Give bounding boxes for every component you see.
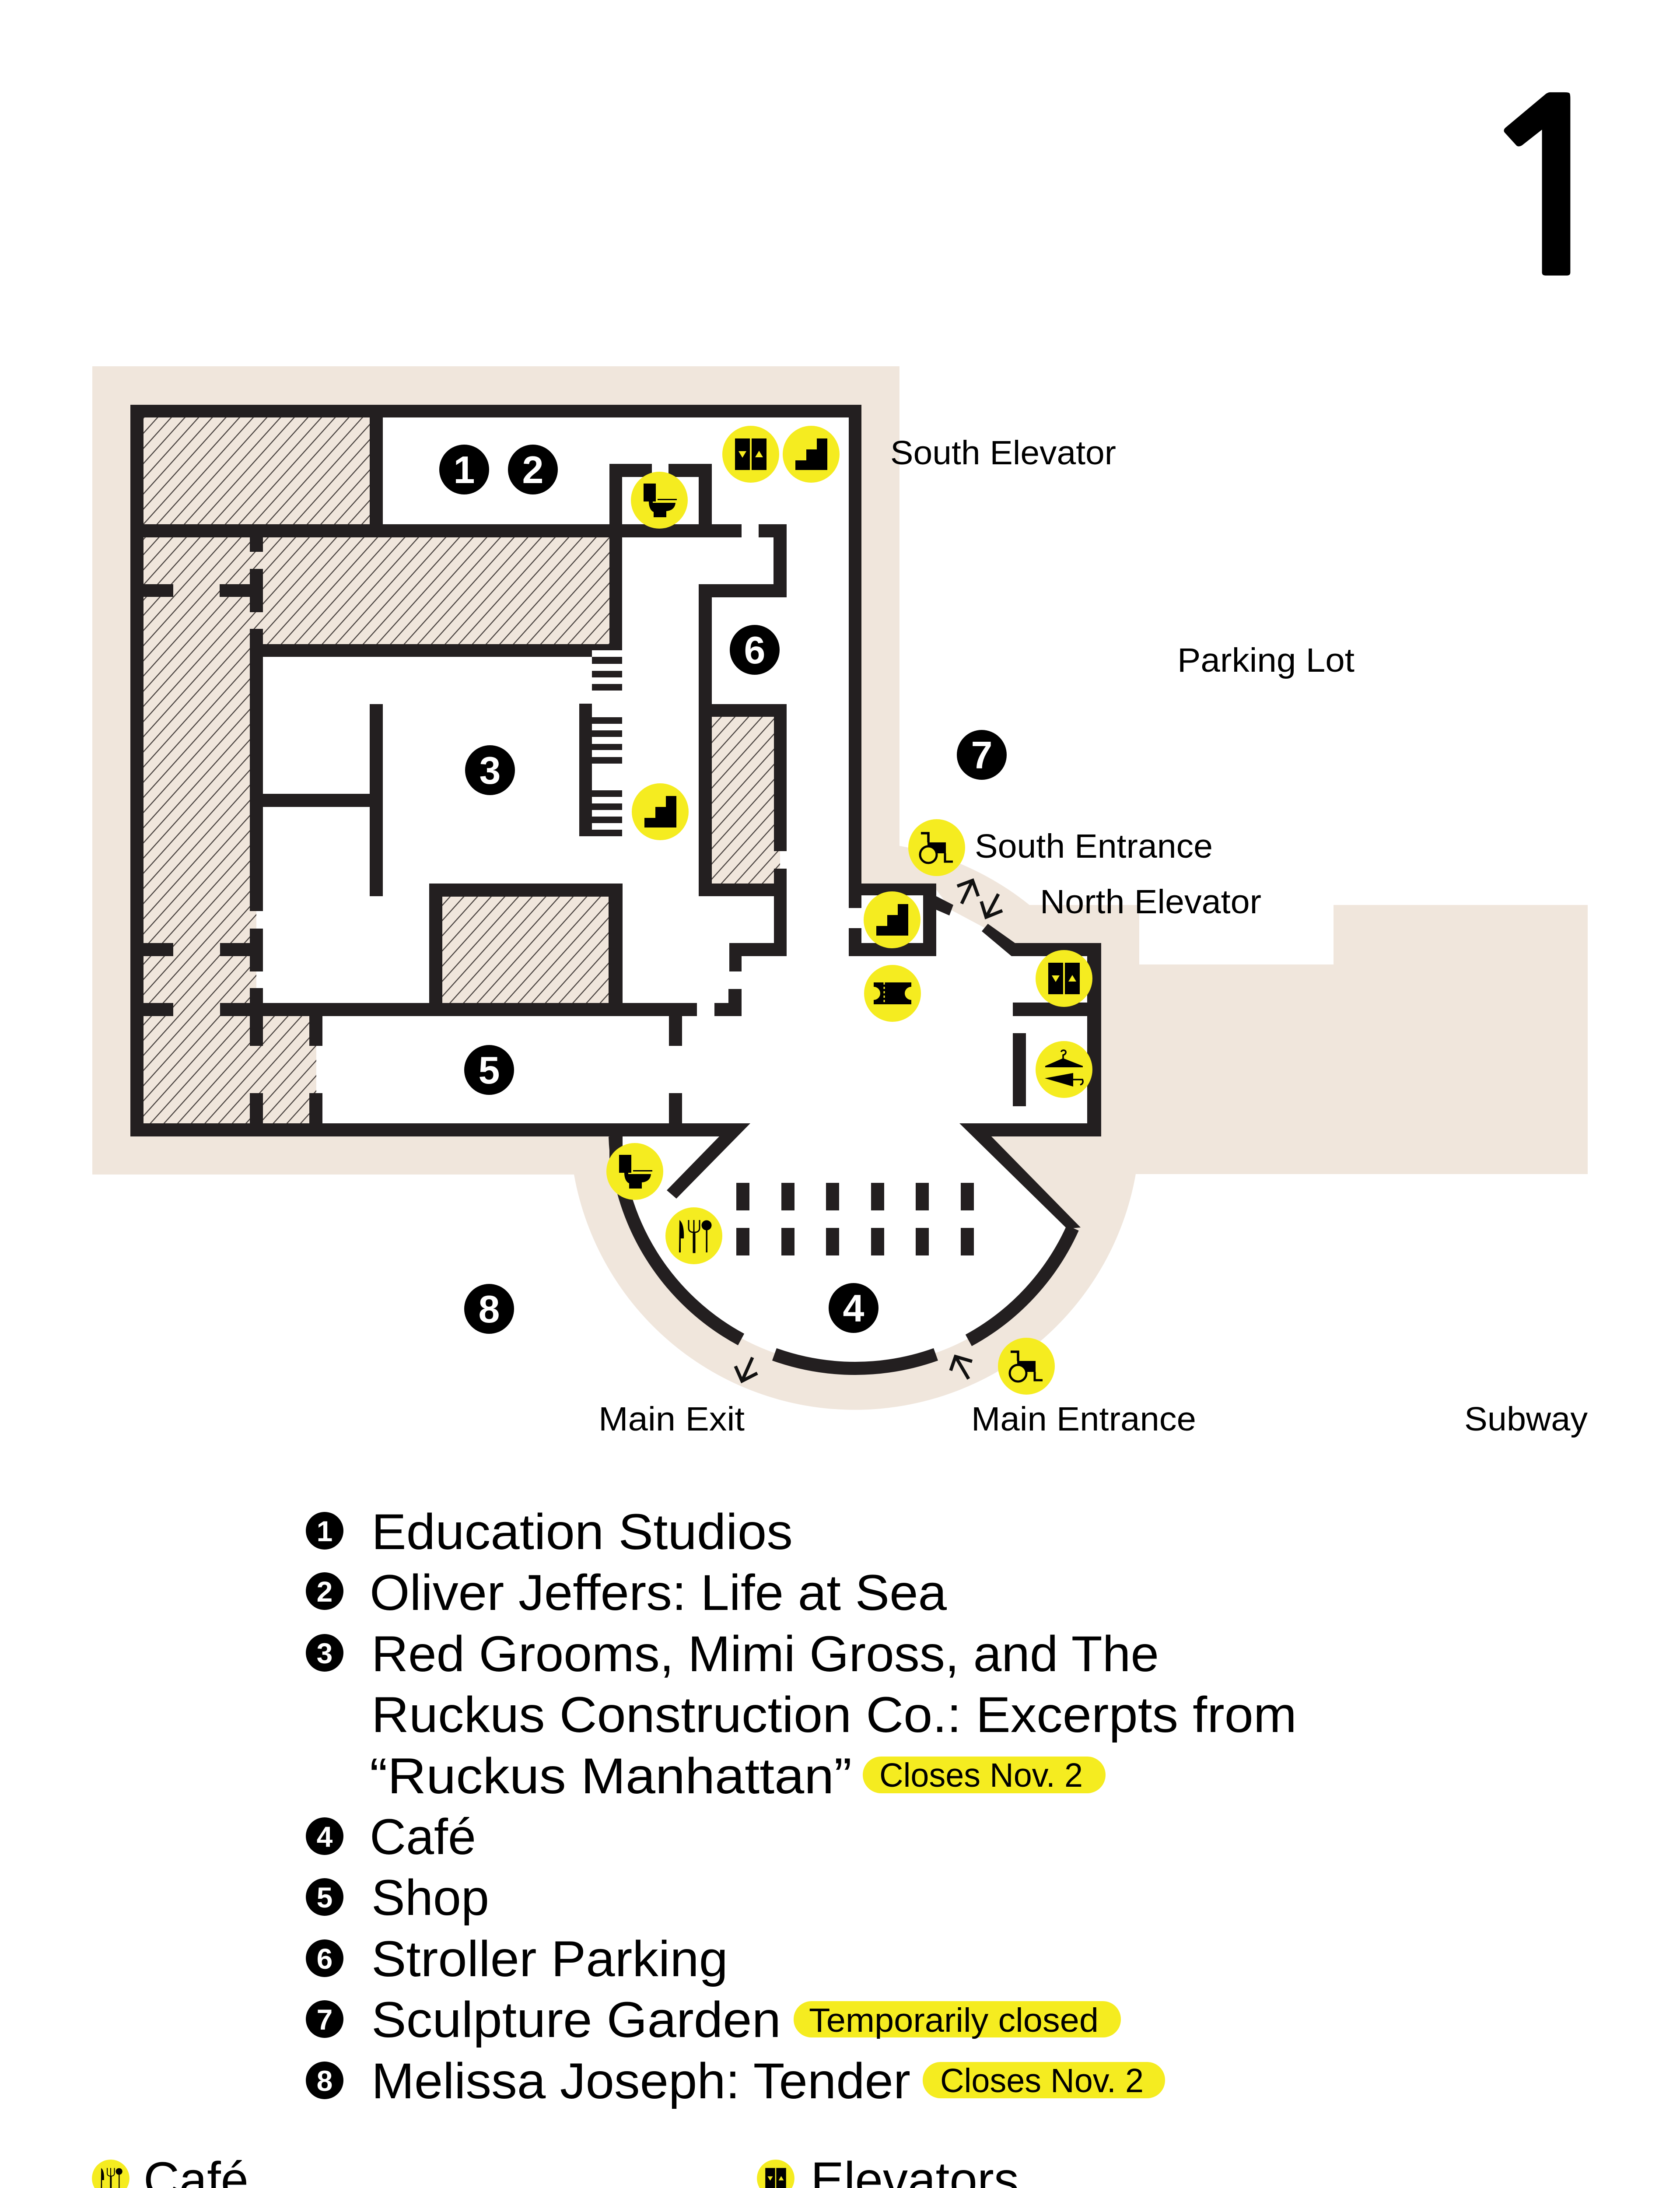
panel: amenities legend <box>92 2152 1318 2188</box>
label: south elevator: South Elevator <box>890 434 1116 472</box>
pill: closes nov 2: Closes Nov. 2 <box>940 2062 1144 2100</box>
list item 5: 5 <box>317 1881 332 1914</box>
map badge 4 <box>829 1283 878 1333</box>
list item 5: Shop <box>371 1870 489 1926</box>
panel: floor plan map <box>92 366 1588 1438</box>
map badge 8 <box>464 1284 514 1334</box>
map badge 7 <box>957 730 1007 780</box>
temporarily closed areas <box>143 417 780 1123</box>
map badge 3 <box>465 745 515 795</box>
icon: south elevator <box>722 426 779 483</box>
building interior <box>130 405 1094 1367</box>
pill: temporarily closed: Temporarily closed <box>809 2002 1099 2039</box>
pill: closes nov 2: Closes Nov. 2 <box>879 1757 1083 1794</box>
panel: numbered gallery list <box>306 1504 1297 2109</box>
list item 7: 7 <box>317 2003 332 2036</box>
list item 4: Café <box>370 1809 476 1865</box>
icon: lobby restroom <box>606 1143 663 1200</box>
list item 4: 4 <box>317 1820 333 1853</box>
list item 1: 1 <box>317 1515 332 1547</box>
list item 3: “Ruckus Manhattan” <box>370 1748 852 1804</box>
list item 2: Oliver Jeffers: Life at Sea <box>370 1565 947 1621</box>
rotunda curved wall <box>615 1136 1073 1368</box>
list item 6: Stroller Parking <box>371 1931 728 1987</box>
icon: coat check <box>1036 1041 1092 1098</box>
list item 2: 2 <box>317 1575 332 1608</box>
icon: gallery stairs <box>632 783 689 840</box>
list item 8: Melissa Joseph: Tender <box>371 2053 910 2109</box>
list item 7: Sculpture Garden <box>371 1992 781 2048</box>
icon: south entrance wheelchair <box>908 819 965 876</box>
map badge 2 <box>508 445 558 494</box>
site background <box>92 366 1588 1410</box>
icon: south stairs <box>783 426 840 483</box>
map badge 5: 5 <box>479 1048 500 1092</box>
list item 3: 3 <box>317 1637 332 1669</box>
map badge 6 <box>730 625 780 675</box>
cafe columns <box>736 1183 974 1255</box>
icon: lobby stairs <box>864 891 920 948</box>
map badge 8: 8 <box>479 1287 500 1331</box>
map badge 6: 6 <box>744 628 765 672</box>
label: north elevator: North Elevator <box>1040 883 1261 921</box>
label: south entrance: South Entrance <box>975 828 1213 865</box>
map badge 2: 2 <box>522 448 543 491</box>
list item 3: Red Grooms, Mimi Gross, and The <box>371 1626 1159 1682</box>
label: main entrance: Main Entrance <box>971 1400 1196 1438</box>
legend cafe <box>92 2152 248 2188</box>
map badge 5 <box>464 1045 514 1095</box>
icon: restroom upper <box>631 472 688 529</box>
label: main exit: Main Exit <box>598 1400 745 1438</box>
map badge 1: 1 <box>454 448 475 491</box>
list item 5 <box>306 1870 489 1926</box>
map badge 7: 7 <box>971 733 992 777</box>
map badge 4: 4 <box>843 1287 864 1330</box>
map badge 1 <box>439 445 489 494</box>
icon: north elevator <box>1036 950 1092 1007</box>
icon: ticketing <box>864 965 921 1022</box>
big floor number top: 1 <box>1470 73 1631 311</box>
label: parking lot: Parking Lot <box>1177 642 1354 679</box>
list item 6: 6 <box>317 1943 332 1975</box>
list item 3 <box>306 1626 1297 1804</box>
stairs treads <box>579 657 622 836</box>
map badge 3: 3 <box>480 749 500 792</box>
entrance and exit arrows <box>735 880 1002 1381</box>
walls <box>130 405 1101 1229</box>
list item 8: 8 <box>317 2065 332 2097</box>
list item 4 <box>306 1809 476 1865</box>
list item 3: Ruckus Construction Co.: Excerpts from <box>371 1687 1297 1743</box>
icon: main entrance wheelchair <box>998 1338 1055 1395</box>
icon: cafe <box>665 1207 722 1264</box>
label: subway: Subway <box>1464 1400 1588 1438</box>
list item 1: Education Studios <box>371 1504 793 1560</box>
